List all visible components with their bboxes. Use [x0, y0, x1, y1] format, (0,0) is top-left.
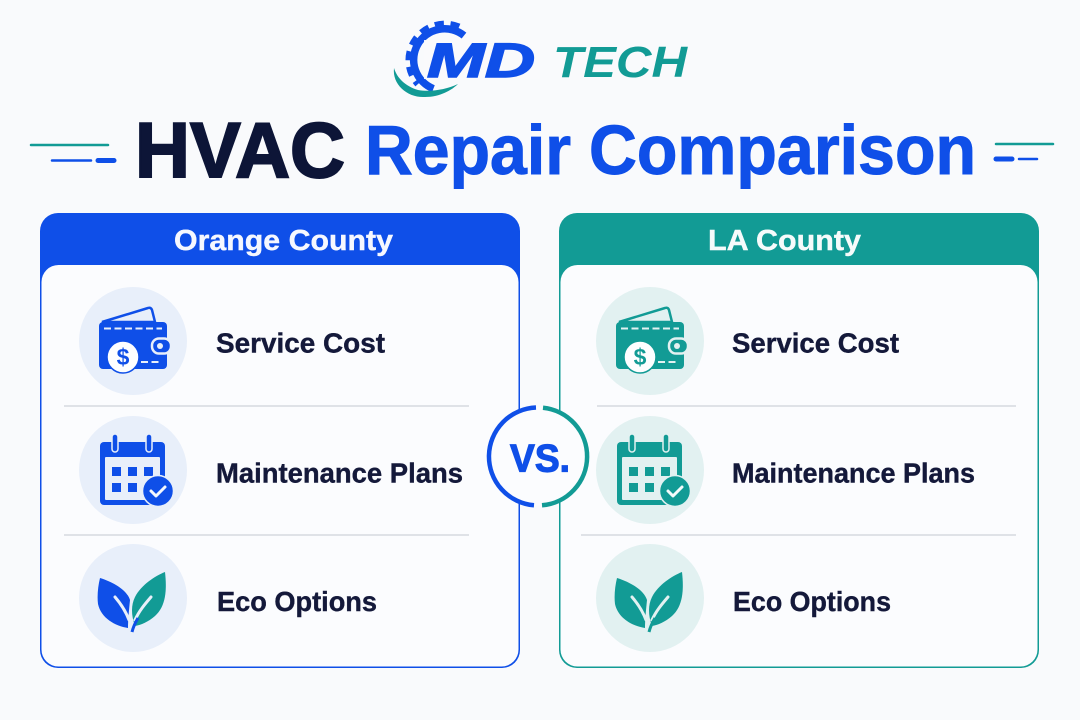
label: Eco Options: Eco Options [733, 586, 891, 617]
logo wordmark backing [424, 40, 540, 79]
VS badge: VS. [510, 438, 570, 480]
logo wordmark MD: MD [427, 35, 535, 88]
logo wordmark TECH: TECH [553, 38, 688, 87]
logo swoosh [394, 68, 458, 97]
icon: leaves [79, 544, 187, 652]
icon: calendar [596, 416, 704, 524]
title accent lines right [996, 144, 1053, 159]
panel heading: LA County [708, 225, 861, 257]
panel header [40, 213, 520, 668]
title: Repair [365, 111, 571, 189]
icon: calendar [79, 416, 187, 524]
label: Eco Options: Eco Options [217, 586, 377, 617]
label: Service Cost: Service Cost [216, 328, 385, 358]
title [135, 106, 976, 194]
title: HVAC [135, 106, 345, 194]
logo: MD Tech [394, 24, 688, 97]
VS badge [489, 408, 587, 506]
icon: wallet: $ [634, 344, 647, 370]
label: Maintenance Plans: Maintenance Plans [216, 458, 463, 488]
logo gear [409, 24, 464, 89]
panel header [559, 213, 1039, 668]
icon: wallet [596, 287, 704, 395]
icon: wallet [79, 287, 187, 395]
panel body [560, 265, 1038, 666]
panel: Orange County [40, 213, 520, 668]
icon: leaves [596, 544, 704, 652]
label: Maintenance Plans: Maintenance Plans [732, 458, 975, 488]
panel heading: Orange County [174, 225, 393, 257]
label: Service Cost: Service Cost [732, 328, 899, 358]
title accent lines left [31, 145, 114, 160]
panel body [42, 265, 518, 666]
panel: LA County [559, 213, 1039, 668]
icon: wallet: $ [117, 344, 130, 370]
title: Comparison [589, 111, 976, 189]
